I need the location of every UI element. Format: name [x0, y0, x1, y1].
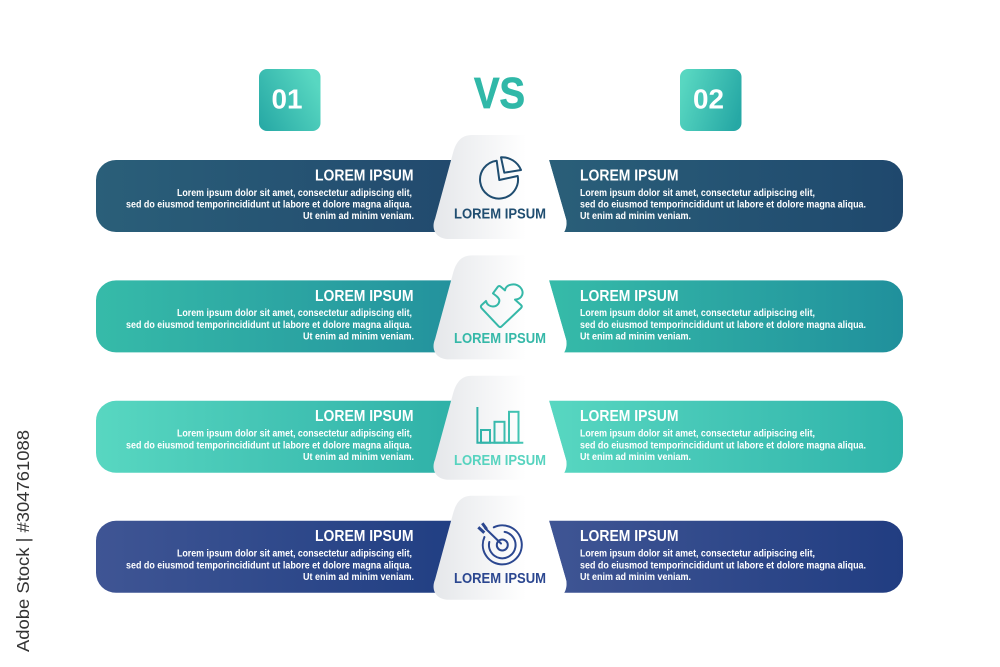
right panel row 2 — [549, 280, 903, 352]
icon: puzzle piece — [481, 284, 523, 327]
centre tab row 2 — [434, 255, 567, 359]
left panel row 3: LOREM IPSUM — [315, 408, 414, 425]
icon: bar chart — [477, 407, 523, 443]
comparison row 2 — [96, 255, 903, 359]
left panel row 4 — [96, 521, 470, 593]
left panel row 1: LOREM IPSUM — [315, 167, 414, 184]
centre tab row 1: LOREM IPSUM — [454, 206, 546, 222]
left panel row 3: Ut enim ad minim veniam. — [303, 452, 414, 463]
comparison row 3 — [96, 376, 903, 480]
right panel row 4 — [549, 521, 903, 593]
left panel row 2: Ut enim ad minim veniam. — [303, 331, 414, 342]
left panel row 3 — [96, 401, 470, 473]
centre tab row 1 — [434, 135, 567, 239]
icon: target with arrow — [478, 523, 522, 564]
badge: 01 — [259, 69, 320, 131]
badge: 02: 02 — [693, 84, 724, 114]
right panel row 1: LOREM IPSUM — [580, 167, 678, 184]
left panel row 3: Lorem ipsum dolor sit amet, consectetur adipiscing elit, — [177, 429, 412, 440]
left panel row 4: LOREM IPSUM — [315, 528, 414, 545]
centre tab row 3 — [434, 376, 567, 480]
left panel row 3: sed do eiusmod temporincididunt ut labore et dolore magna aliqua. — [126, 440, 412, 451]
left panel row 1 — [96, 160, 470, 232]
right panel row 4: Lorem ipsum dolor sit amet, consectetur adipiscing elit, — [580, 549, 815, 560]
right panel row 2: sed do eiusmod temporincididunt ut labore et dolore magna aliqua. — [580, 320, 866, 331]
centre tab row 4: LOREM IPSUM — [454, 571, 546, 587]
left panel row 4: Lorem ipsum dolor sit amet, consectetur adipiscing elit, — [177, 549, 412, 560]
left panel row 1: Lorem ipsum dolor sit amet, consectetur adipiscing elit, — [177, 188, 412, 199]
left panel row 4: Ut enim ad minim veniam. — [303, 572, 414, 583]
badge: 02 — [680, 69, 742, 131]
left panel row 4: sed do eiusmod temporincididunt ut labore et dolore magna aliqua. — [126, 560, 412, 571]
left panel row 2: Lorem ipsum dolor sit amet, consectetur adipiscing elit, — [177, 308, 412, 319]
right panel row 1 — [549, 160, 903, 232]
right panel row 1: sed do eiusmod temporincididunt ut labore et dolore magna aliqua. — [580, 200, 866, 210]
left panel row 1: sed do eiusmod temporincididunt ut labore et dolore magna aliqua. — [126, 200, 412, 210]
comparison row 4 — [96, 496, 903, 600]
right panel row 1: Lorem ipsum dolor sit amet, consectetur adipiscing elit, — [580, 188, 815, 199]
right panel row 3: Lorem ipsum dolor sit amet, consectetur adipiscing elit, — [580, 429, 815, 440]
badge: 01: 01 — [272, 84, 302, 114]
right panel row 3 — [549, 401, 903, 473]
right panel row 3: sed do eiusmod temporincididunt ut labore et dolore magna aliqua. — [580, 440, 866, 451]
right panel row 4: Ut enim ad minim veniam. — [580, 572, 691, 583]
right panel row 2: LOREM IPSUM — [580, 288, 678, 305]
comparison row 1 — [96, 135, 903, 239]
icon: pie chart — [480, 157, 521, 199]
stock credit, vertical text: Adobe Stock | #304761088 — [13, 430, 33, 652]
heading: VS: VS — [474, 69, 525, 118]
left panel row 2: sed do eiusmod temporincididunt ut labore et dolore magna aliqua. — [126, 320, 412, 331]
right panel row 3: Ut enim ad minim veniam. — [580, 452, 691, 463]
centre tab row 4 — [434, 496, 567, 600]
right panel row 4: sed do eiusmod temporincididunt ut labore et dolore magna aliqua. — [580, 560, 866, 571]
centre tab row 2: LOREM IPSUM — [454, 331, 546, 347]
right panel row 2: Ut enim ad minim veniam. — [580, 331, 691, 342]
right panel row 4: LOREM IPSUM — [580, 528, 678, 545]
left panel row 2: LOREM IPSUM — [315, 288, 414, 305]
centre tab row 3: LOREM IPSUM — [454, 453, 546, 469]
left panel row 1: Ut enim ad minim veniam. — [303, 211, 414, 222]
right panel row 2: Lorem ipsum dolor sit amet, consectetur adipiscing elit, — [580, 308, 815, 319]
left panel row 2 — [96, 280, 470, 352]
right panel row 1: Ut enim ad minim veniam. — [580, 211, 691, 222]
right panel row 3: LOREM IPSUM — [580, 408, 678, 425]
